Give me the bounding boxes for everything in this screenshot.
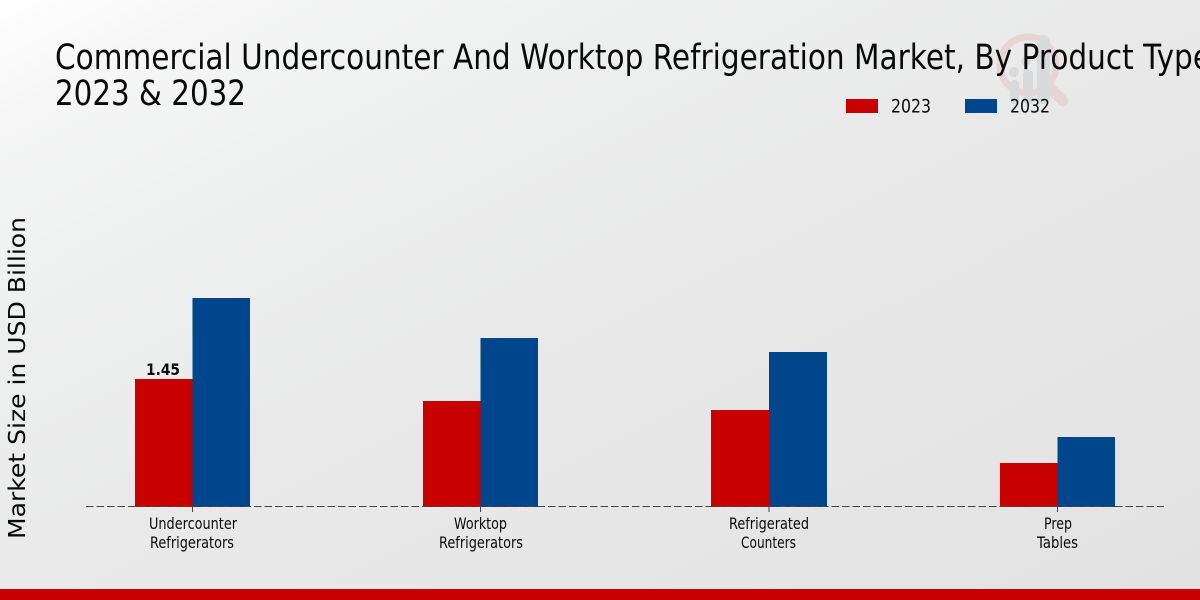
- category label: Refrigerated Counters: Counters: [741, 533, 796, 552]
- title: [55, 38, 1200, 114]
- category label: Undercounter Refrigerators: Undercounter: [149, 514, 237, 533]
- category label: Worktop Refrigerators: Refrigerators: [439, 533, 523, 552]
- bars: Undercounter Refrigerators: [135, 298, 250, 507]
- category label: Worktop Refrigerators: Worktop: [454, 514, 507, 533]
- category label: Undercounter Refrigerators: Refrigerators: [150, 533, 234, 552]
- category label: Prep Tables: Tables: [1036, 533, 1078, 552]
- bars: Worktop Refrigerators: [423, 338, 538, 507]
- category label: Worktop Refrigerators: [439, 514, 523, 552]
- category label: Prep Tables: Prep: [1044, 514, 1072, 533]
- watermark logo: [1000, 35, 1063, 104]
- category label: Refrigerated Counters: [729, 514, 809, 552]
- category label: Prep Tables: [1036, 514, 1078, 552]
- legend: 2032: [1010, 96, 1050, 118]
- legend: [846, 96, 1050, 118]
- bars: Refrigerated Counters: [711, 352, 827, 507]
- y axis label: Market Size in USD Billion: [5, 217, 31, 539]
- value label: 1.45: [146, 360, 180, 379]
- legend: 2023: [891, 96, 931, 118]
- category label: Undercounter Refrigerators: [149, 514, 237, 552]
- title: 2023 & 2032: [55, 74, 246, 114]
- category label: Refrigerated Counters: Refrigerated: [729, 514, 809, 533]
- footer bar: [0, 589, 1200, 600]
- bar chart: [86, 298, 1164, 552]
- bars: Prep Tables: [1000, 437, 1115, 507]
